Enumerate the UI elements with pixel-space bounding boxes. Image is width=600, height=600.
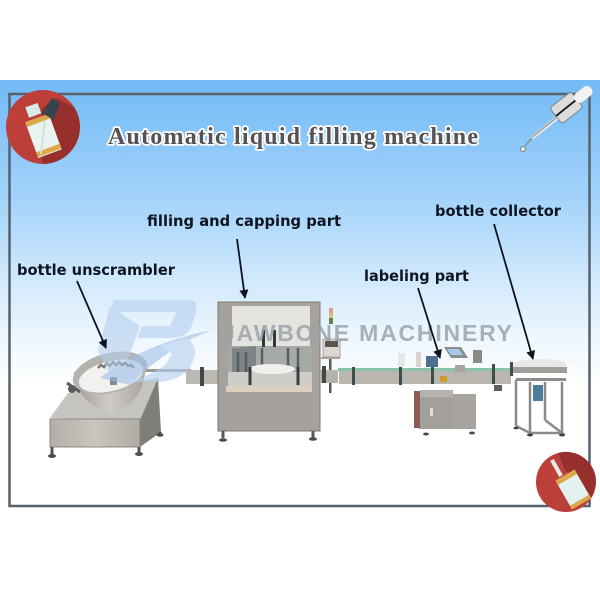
control panel [321,339,340,393]
label: labeling part: labeling part [364,267,469,285]
title: Automatic liquid filling machine [108,124,478,150]
conveyor link 2 [320,362,513,385]
touch screen [444,347,468,358]
arrow: to unscrambler [77,281,106,348]
icon: dropper top right [520,84,595,152]
icon: bottle badge bottom right [536,452,596,512]
filling equipment [228,330,312,386]
label: bottle unscrambler: bottle unscrambler [17,261,176,279]
collector table [513,359,567,371]
machine deck [226,386,312,392]
unscrambler table [48,378,164,458]
arrow: to labeling [418,288,440,358]
labeling machine [398,347,502,436]
watermark text: JAWBONE MACHINERY [222,320,512,346]
sky gradient background [0,80,600,525]
signal light [329,308,333,324]
outer frame [10,94,590,506]
conveyor link 1 [146,367,218,386]
icon: dropper bottle badge top left [6,90,80,164]
collector frame [516,380,562,433]
label: bottle collector: bottle collector [435,202,562,220]
unscrambler bowl [67,344,152,412]
watermark logo [98,300,212,385]
arrow: to filling and capping [237,239,245,298]
filling and capping machine [218,302,320,442]
labeling base [419,396,455,429]
label: filling and capping part: filling and capping part [147,212,341,230]
unscrambler machine [48,344,218,458]
bottle collector [513,359,567,436]
bottles on line [398,352,438,367]
arrow: to collector [494,224,533,359]
machine window [232,306,310,348]
